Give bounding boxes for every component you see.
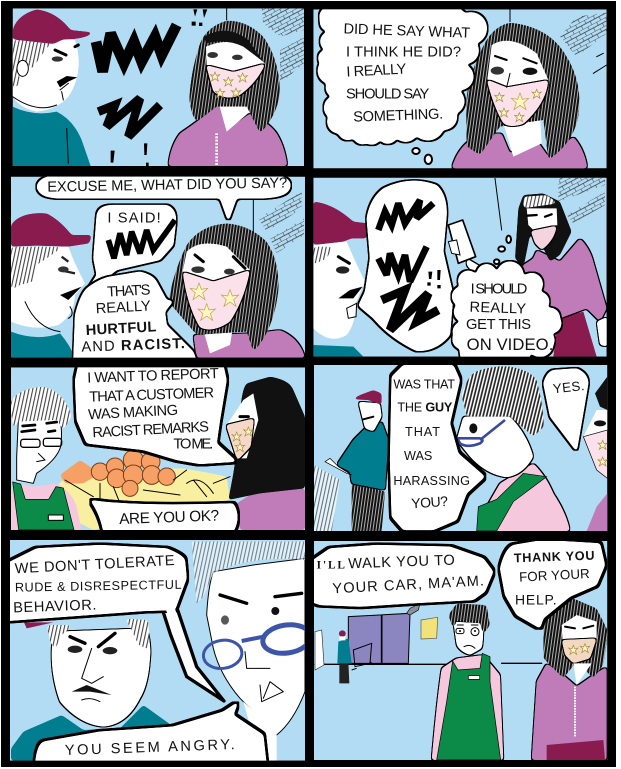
shelves [510,9,607,73]
speech bubble: excuse me [37,175,291,222]
panel 1: man mutters, woman overhears [13,8,304,168]
speech bubble: was that the guy: THAT [405,425,440,439]
speech bubble: are you ok: ARE YOU OK? [119,508,219,528]
worker with glasses [10,387,82,530]
small man with cart [337,630,373,683]
speech bubble: yes: YES. [552,378,585,396]
speech bubble: rude behavior: WE DON'T TOLERATE [14,553,175,577]
woman partly visible [583,377,607,531]
panel 3 background [11,177,305,358]
speech bubble: rude behavior: BEHAVIOR. [13,597,97,616]
panel 6: was that the guy [314,365,607,531]
speech bubble: walk you to car: I'LL [317,559,345,571]
panel 8 background [314,541,607,760]
thought text: SOMETHING. [353,107,443,126]
thought dots and cloud: should get video: ON VIDEO. [467,335,553,354]
speech bubble: was that the guy: YOU? [411,493,449,511]
man in cap [313,202,368,357]
panel 4 background [313,178,607,357]
woman with phone [513,193,607,357]
woman in profile [226,377,305,530]
speech bubble: walk you to car: YOUR CAR, MA'AM. [332,573,484,597]
speech bubble: walk you to car [311,545,493,607]
speech bubble: want to report: RACIST REMARKS [92,419,210,441]
speech bubble: want to report: TO ME. [173,436,213,452]
speech bubble: was that the guy [390,365,485,530]
speech bubble: want to report: THAT A CUSTOMER [89,385,214,406]
thought text [343,21,470,126]
woman in mask [452,23,587,168]
speech bubble: that's really hurtful: HURTFUL [85,319,157,339]
speech bubble: was that the guy: WAS [404,449,432,463]
speech bubble: rude behavior [7,545,224,701]
speech bubble: I said: I SAID! [107,211,161,227]
scribbled speech marks [96,9,207,166]
thought text: I THINK HE DID? [346,45,461,61]
speech bubble: thank you [500,540,605,628]
woman in jacket [532,598,608,760]
speech bubble: scribbles [358,181,453,351]
thought bubble [318,6,487,164]
speech bubble: thank you: FOR YOUR [519,566,590,585]
speech bubble: you seem angry: YOU SEEM ANGRY. [65,737,235,759]
thought text: DID HE SAY WHAT [343,21,470,42]
woman in mask [168,223,305,358]
angry man [11,618,173,761]
thought text: SHOULD SAY [346,86,430,102]
thought dots and cloud: should get video: REALLY [469,300,527,318]
worker with blue glasses [457,366,570,531]
speech bubble: are you ok [90,500,237,532]
panel 6 background [314,365,607,531]
speech bubble: yes [543,368,588,452]
woman in mask [168,21,287,168]
speech bubble: thank you: HELP. [515,591,557,607]
thought dots and cloud: should get video [452,236,561,370]
man in cap [13,9,93,166]
speech bubble: was that the guy: HARASSING [393,474,470,488]
speech bubble: you seem angry [35,702,267,765]
speech bubble: excuse me: EXCUSE ME, WHAT DID YOU SAY? [47,175,287,196]
man in cap [11,213,92,358]
worker close-up [192,542,312,761]
speech bubble: was that the guy: THE GUY [397,401,453,415]
speech bubble: that's really hurtful: REALLY [95,298,151,317]
panel 7: you seem angry [7,540,312,765]
speech bubble: walk you to car: WALK YOU TO [348,553,455,572]
panel 8: walk you to your car [311,540,608,760]
speech bubble: want to report [75,365,237,464]
panel 4: woman films [313,178,607,370]
speech bubble: that's really hurtful: THAT'S [107,282,151,301]
worker in green apron [432,603,503,760]
speech bubble: was that the guy: WAS THAT [393,377,455,391]
shelves [227,8,304,83]
speech bubble: rude behavior: RUDE & DISRESPECTFUL [15,578,182,595]
panel 2: woman thinks [313,6,607,168]
panel 5: reporting to worker [10,365,305,532]
hand and phone [448,219,480,270]
panel 3: excuse me [11,175,305,361]
thought dots and cloud: should get video: GET THIS [466,317,531,333]
panel 5 background [11,367,305,530]
produce display [58,450,230,530]
speech bubble: want to report: I WANT TO REPORT [87,366,219,387]
panel 1 background [13,8,304,166]
store back wall: door, poster, floor line [315,603,542,670]
panel 2 background [313,9,607,168]
speech bubble: thank you: THANK YOU [514,549,595,565]
thought dots and cloud: should get video: I SHOULD [471,281,527,297]
speech bubble: want to report: WAS MAKING [88,403,178,423]
thought text: I REALLY [346,62,407,81]
shelves [253,192,304,253]
speech bubble: that's really hurtful: AND RACIST. [81,336,185,356]
man with cart in distance [314,390,388,531]
shelves [495,178,605,230]
speech bubble: I said [88,203,178,285]
speech bubble: that's really hurtful [73,272,197,361]
panel 7 background [10,540,305,761]
